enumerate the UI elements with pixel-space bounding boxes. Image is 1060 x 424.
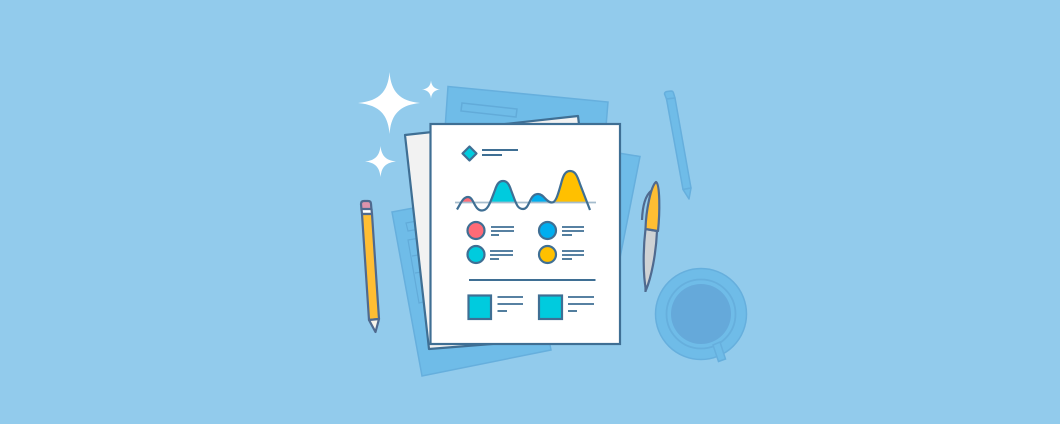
pen [642, 182, 659, 292]
cup handle [713, 342, 726, 362]
front page [430, 124, 620, 344]
faded coffee cup [656, 268, 746, 362]
pencil [361, 201, 379, 332]
faint table on bottom left sheet [406, 221, 432, 303]
back sheet: top [440, 86, 608, 200]
sparkle: medium lower [365, 146, 396, 177]
back sheet: right [600, 150, 640, 268]
heading marker: diamond [462, 146, 476, 160]
back sheet: bottom left [392, 203, 551, 376]
divider line [469, 279, 596, 281]
sparkle: small top right [422, 80, 440, 98]
faded pencil top right [664, 91, 691, 199]
area chart [455, 171, 596, 212]
bottom squares with lines [468, 296, 594, 319]
faint label on top sheet [461, 103, 517, 117]
legend: four coloured circles with lines [468, 222, 584, 263]
heading lines [482, 150, 518, 155]
sparkle: large [358, 72, 420, 134]
middle paper sheet [405, 116, 604, 349]
